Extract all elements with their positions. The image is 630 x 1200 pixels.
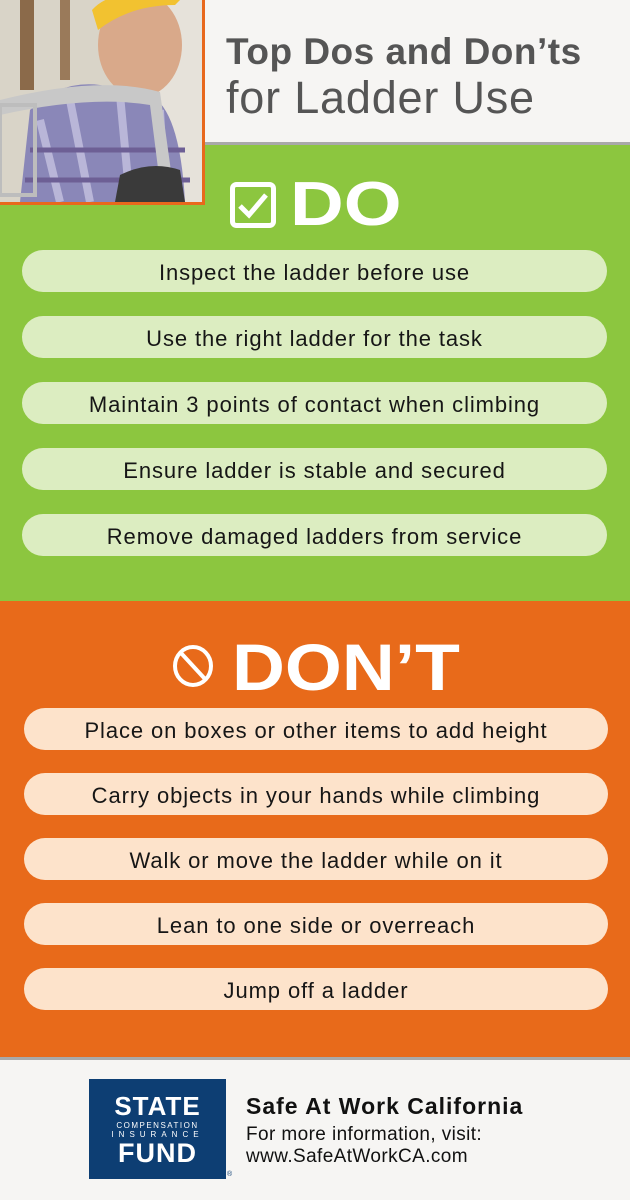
title — [226, 31, 582, 123]
list: dont items: Carry objects in your hands while climbing — [92, 783, 540, 808]
title: for Ladder Use — [226, 72, 535, 123]
logo: State Compensation Insurance Fund: COMPENSATION — [116, 1121, 199, 1130]
icon: checkbox — [230, 182, 276, 228]
heading: DON'T: DON’T — [232, 630, 460, 704]
title: Top Dos and Don’ts — [226, 31, 582, 72]
text: contact info — [246, 1093, 523, 1167]
panel: DO — [0, 145, 630, 601]
list: dont items: Lean to one side or overreach — [157, 913, 475, 938]
list: dont items: Jump off a ladder — [224, 978, 408, 1003]
list: do items: Inspect the ladder before use — [159, 260, 470, 285]
header background — [0, 0, 630, 143]
footer — [89, 1079, 523, 1179]
logo: State Compensation Insurance Fund — [89, 1079, 232, 1179]
text: contact info: For more information, visit: — [246, 1124, 482, 1145]
list: do items: Use the right ladder for the task — [146, 326, 483, 351]
list: do items: Ensure ladder is stable and secured — [123, 458, 506, 483]
photo: worker with ladder — [0, 0, 205, 205]
heading: DO: DO — [290, 170, 402, 239]
logo: State Compensation Insurance Fund: STATE — [114, 1091, 201, 1121]
icon: prohibited — [173, 645, 213, 687]
logo: State Compensation Insurance Fund: ® — [227, 1171, 232, 1178]
logo: State Compensation Insurance Fund: FUND — [118, 1138, 197, 1168]
text: contact info: Safe At Work California — [246, 1093, 523, 1119]
list: dont items — [24, 708, 608, 1010]
list: do items: Maintain 3 points of contact when climbing — [89, 392, 540, 417]
panel: DON'T — [0, 601, 630, 1057]
list: do items: Remove damaged ladders from service — [107, 524, 522, 549]
list: dont items: Place on boxes or other items to add height — [84, 718, 548, 743]
list: dont items: Walk or move the ladder while on it — [129, 848, 503, 873]
list: do items — [22, 250, 607, 556]
heading: DO — [230, 170, 402, 239]
text: contact info: www.SafeAtWorkCA.com — [246, 1146, 468, 1167]
logo: State Compensation Insurance Fund: INSURANCE — [111, 1130, 204, 1139]
